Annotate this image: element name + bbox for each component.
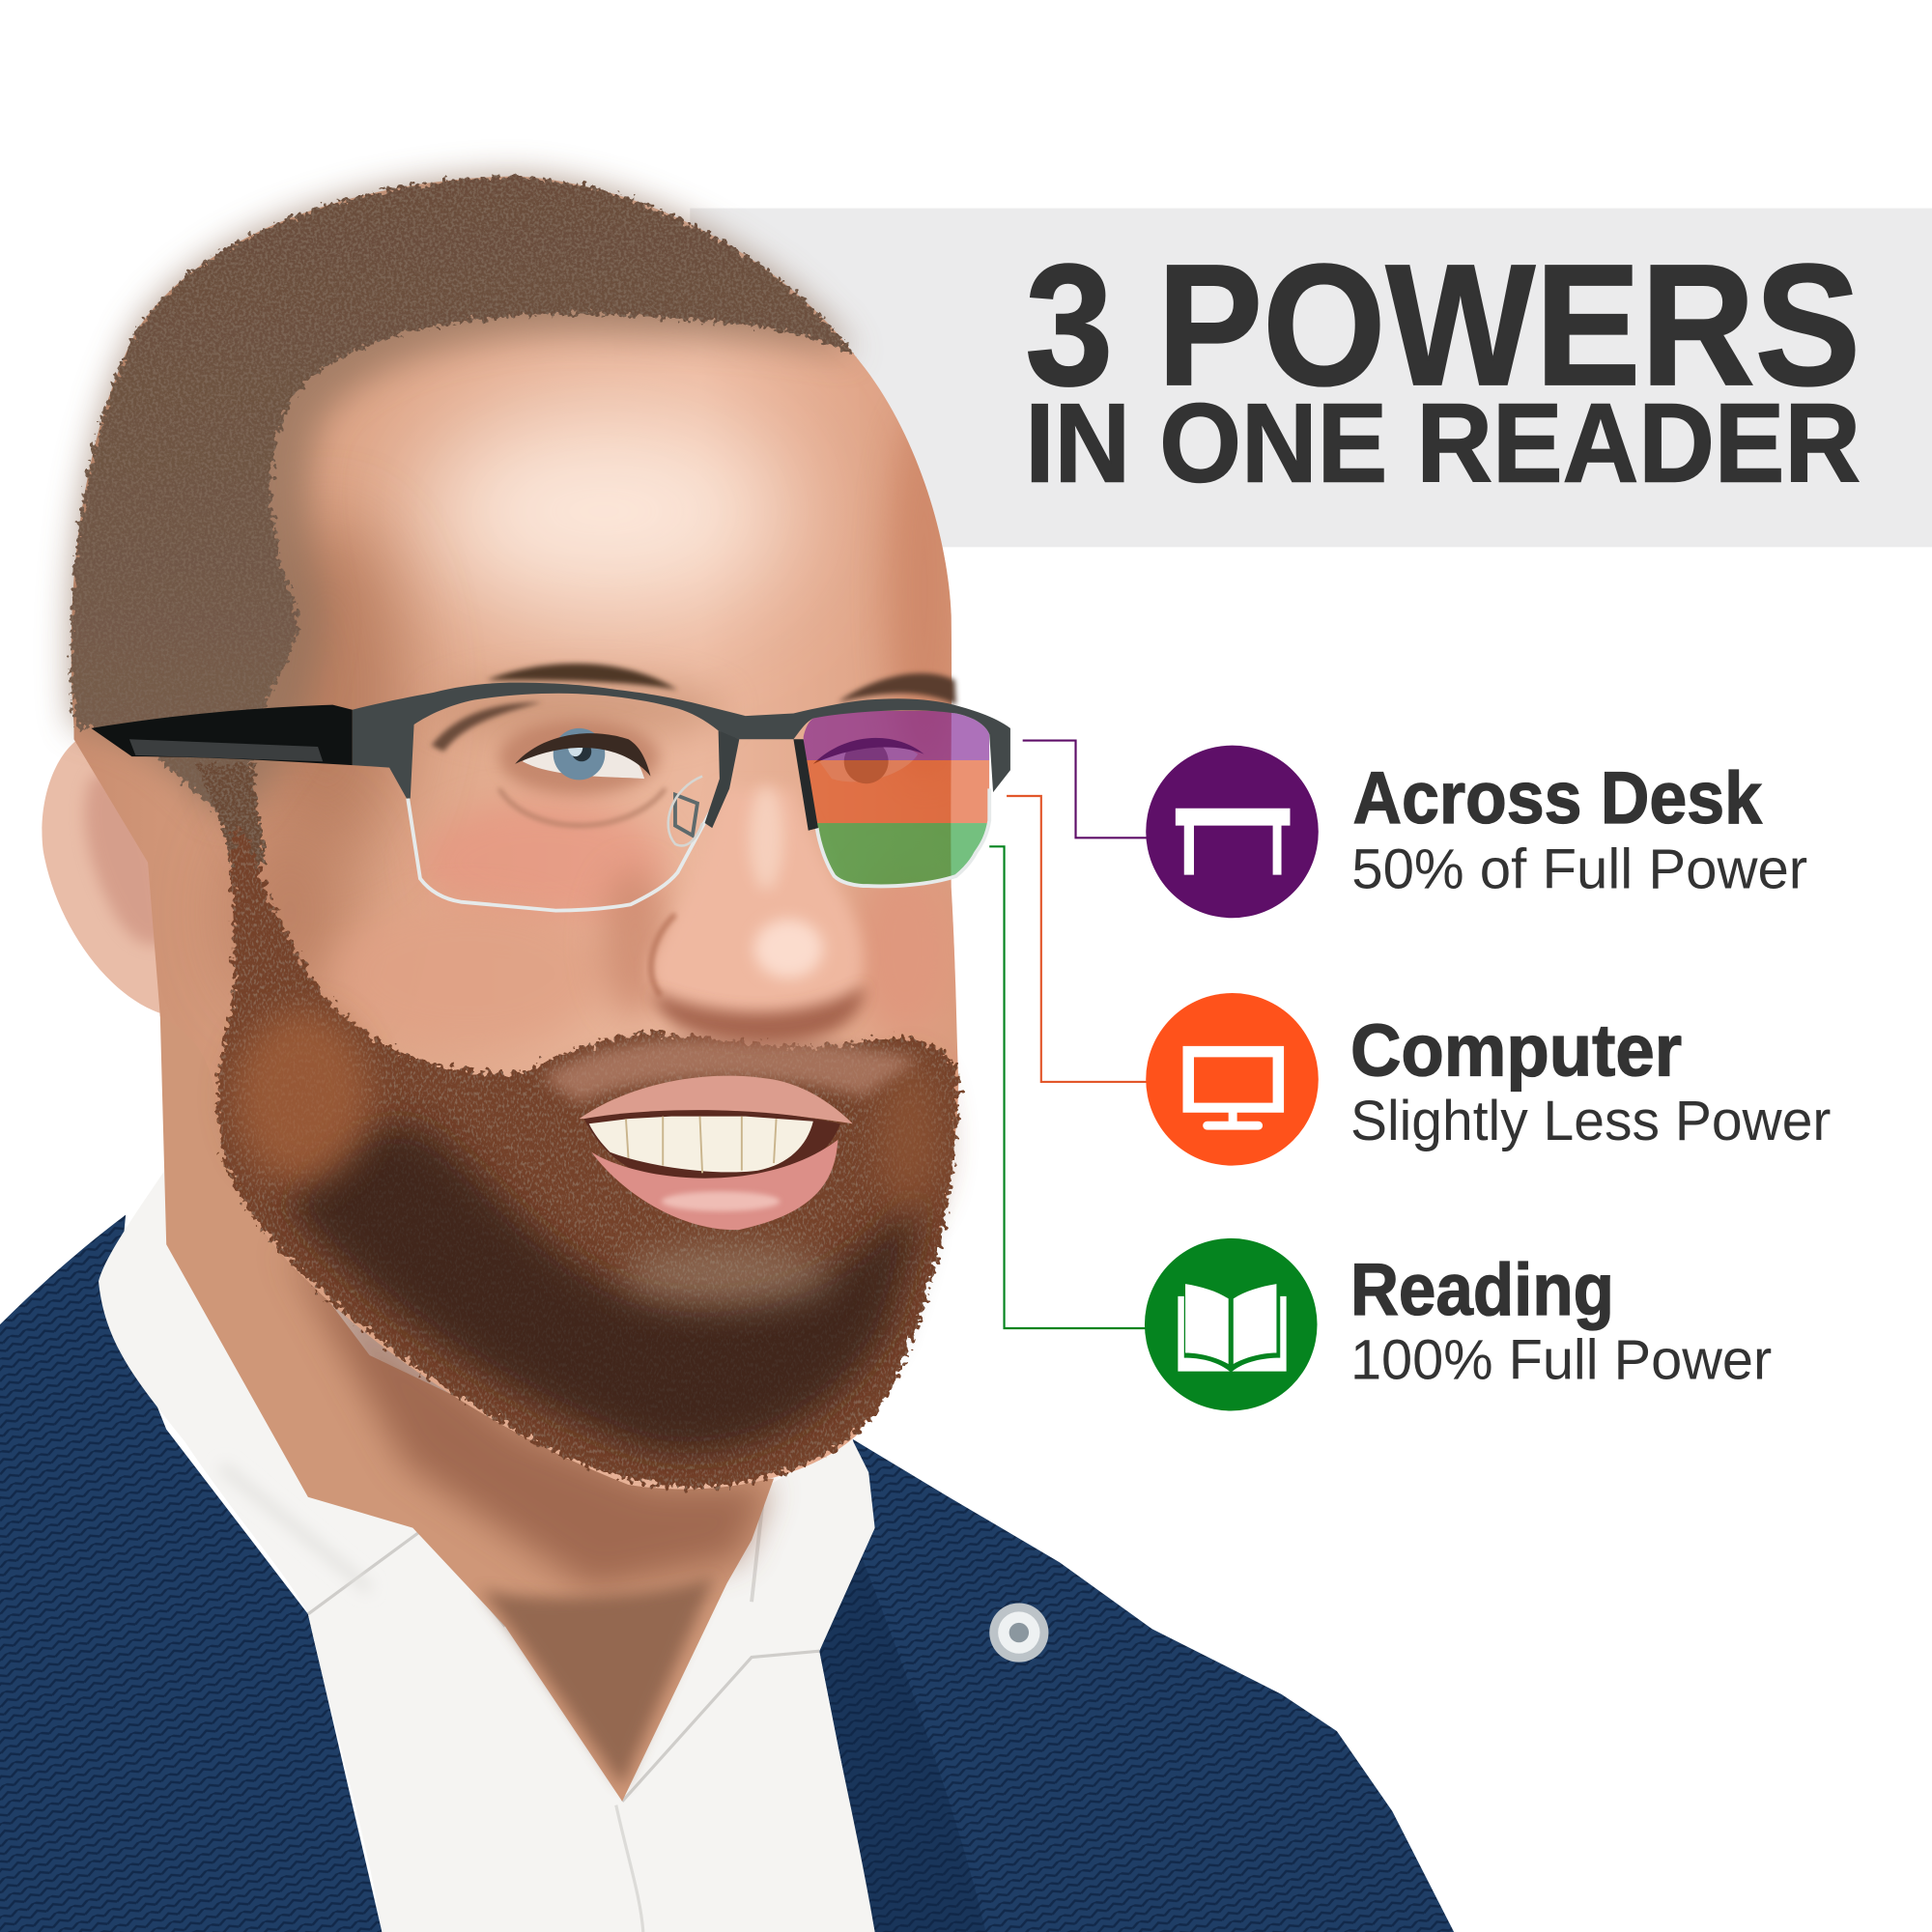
right eye [813,673,956,783]
line: reading [989,846,1146,1328]
neck shadow [283,1244,770,1589]
glasses [91,683,1010,911]
right lid [813,738,924,764]
eye bag [499,788,666,826]
mouth [579,1076,853,1230]
nose side shadow [600,868,669,1016]
jacket: right side [819,1439,1454,1932]
sublabel: slightly less: Slightly Less Power [1350,1090,1831,1152]
cheek blush [419,801,666,924]
nose pad [668,777,702,845]
line: computer [1007,796,1149,1082]
icon: open book [1145,1238,1318,1410]
beard right auburn [877,1060,941,1220]
heading band [690,209,1932,547]
right eye white [819,743,918,781]
upper lid [515,733,650,777]
left eye [431,664,678,826]
beard [217,826,958,1488]
chin grey patch [622,1246,832,1305]
shirt [99,1168,875,1932]
beard auburn cheek [234,1010,370,1182]
neck [148,863,774,1802]
shirt fold shading [222,1466,819,1932]
label: reading: Reading [1350,1249,1614,1331]
right lens rim [817,788,989,886]
left eyebrow [487,664,678,690]
sublabel: 50%: 50% of Full Power [1351,838,1807,901]
person portrait [0,160,1454,1932]
lens brow [431,702,542,752]
lower lip [591,1140,838,1230]
title line 1: 3 POWERS [1025,228,1861,421]
chest hair [480,1577,715,1786]
title [1025,228,1861,506]
temple arm [91,705,353,765]
iris [554,728,605,780]
teeth [589,1117,813,1172]
jacket: left side [0,1215,382,1932]
face side shade [228,813,352,1010]
left lens rim [408,799,712,911]
right iris [844,739,889,783]
lower cheek [338,935,593,1028]
beard dark mass [290,1125,920,1454]
nose [651,786,865,1042]
pupil [572,742,591,761]
brow ridge shade [431,676,727,741]
bridge arm left [705,730,739,828]
sideburn [197,764,265,887]
temple highlight [129,739,323,761]
nose bridge highlight [750,786,783,890]
hair [71,176,856,813]
upper lip [579,1076,853,1123]
right eyebrow [838,673,956,705]
title line 2: IN ONE READER [1025,381,1861,506]
purple zone: across desk [795,702,998,760]
pointer lines [989,741,1149,1328]
icon: table [1146,746,1319,918]
mouth interior [584,1110,840,1185]
ear [42,729,229,1017]
line: across desk [1023,741,1149,838]
icon: monitor [1146,993,1319,1166]
nose highlight [754,920,823,979]
catchlight [568,737,582,756]
right cheek [863,887,956,1016]
jacket lapel shading [819,1528,985,1932]
head and face skin [62,160,974,1503]
bridge arm right [793,739,818,831]
item: reading [1145,1238,1772,1410]
temple shade [246,518,407,863]
eye white [523,738,644,779]
frame browline [353,683,1010,799]
green zone: reading [795,823,998,891]
label: computer: Computer [1350,1010,1682,1093]
forehead edge shade [877,423,952,723]
colour zones on right lens [795,702,998,891]
label: across desk: Across Desk [1353,757,1762,839]
orange zone: computer [795,760,998,823]
item: computer [1146,993,1831,1166]
tooth gaps [626,1117,777,1173]
nose wing edge [651,914,675,996]
hairline fade under hair [71,176,856,813]
sublabel: 100%: 100% Full Power [1350,1328,1772,1391]
item: across desk [1146,746,1807,918]
moustache skin show-through [542,1037,918,1103]
eye socket [499,721,659,795]
nose underside [653,985,865,1042]
lower lip highlight [662,1191,780,1211]
forehead highlight [419,407,788,616]
jacket button [989,1603,1048,1662]
